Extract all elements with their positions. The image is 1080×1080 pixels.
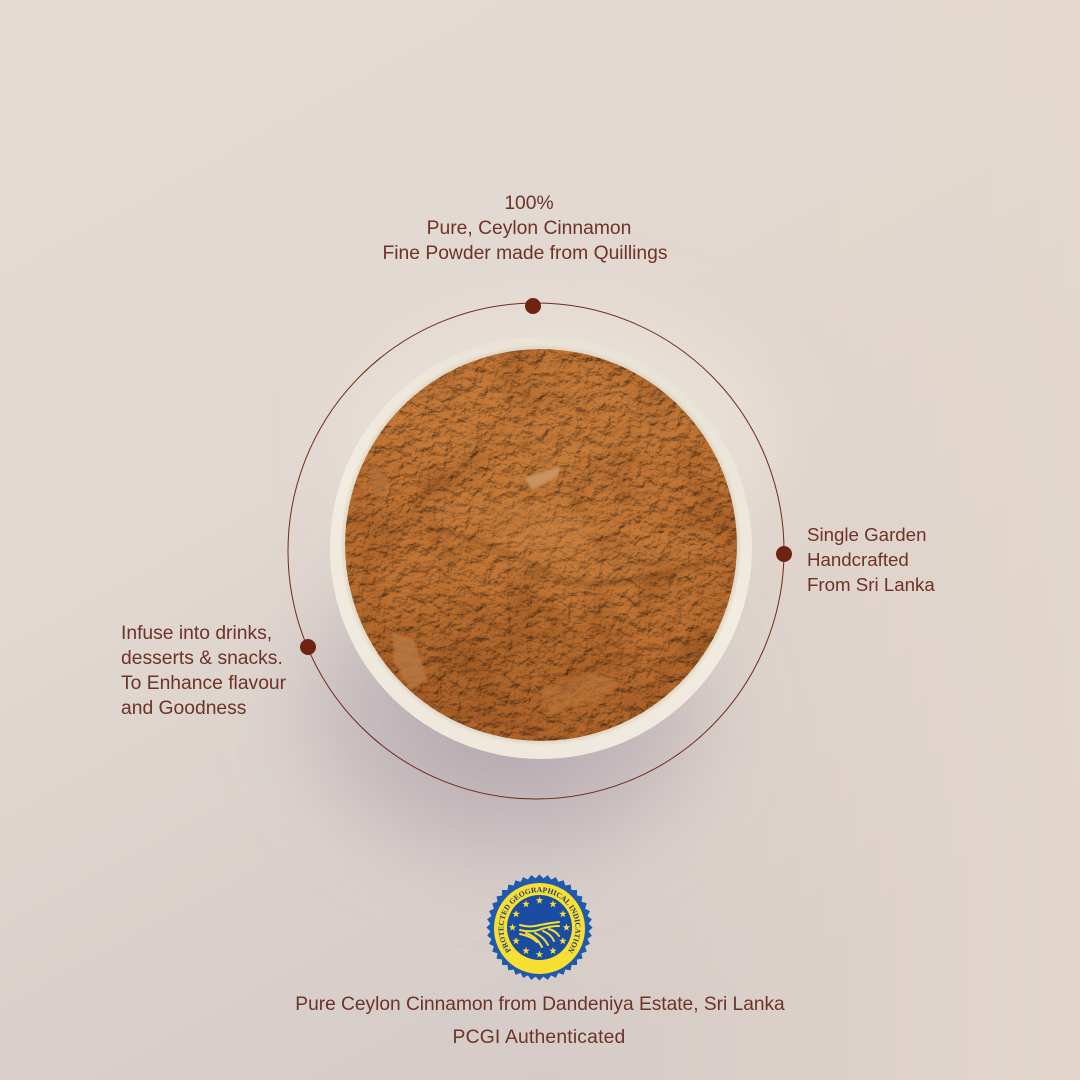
powder chunks <box>524 466 560 490</box>
text: right callout: From Sri Lanka <box>807 574 935 595</box>
text: authentication: PCGI Authenticated <box>453 1027 625 1048</box>
callout dots <box>300 298 792 655</box>
ring <box>288 303 784 799</box>
text: left callout: and Goodness <box>121 698 246 719</box>
powder grain texture <box>345 349 737 741</box>
text: top callout <box>382 193 668 264</box>
text: top callout: Fine Powder made from Quillings <box>382 243 668 264</box>
bowl <box>330 337 752 759</box>
text: left callout: Infuse into drinks, <box>121 623 272 644</box>
text: left callout: desserts & snacks. <box>121 648 283 669</box>
light halo around bowl top <box>345 305 775 575</box>
icon: PGI seal: PROTECTED GEOGRAPHICAL INDICATION <box>498 887 580 954</box>
cinnamon powder <box>345 349 737 741</box>
photo background with bowl, ring and seal <box>169 298 792 1080</box>
text: origin statement: Pure Ceylon Cinnamon from Dandeniya Estate, Sri Lanka <box>295 994 785 1015</box>
text: left callout: To Enhance flavour <box>121 673 286 694</box>
text: left callout <box>121 623 286 719</box>
text: top callout: 100% <box>504 193 554 214</box>
powder ridges <box>420 438 710 725</box>
icon: PGI seal <box>486 874 592 980</box>
text: right callout: Single Garden <box>807 524 926 545</box>
text: right callout <box>807 524 935 595</box>
bowl shadow <box>260 515 750 895</box>
text: right callout: Handcrafted <box>807 549 909 570</box>
text: top callout: Pure, Ceylon Cinnamon <box>427 218 631 239</box>
